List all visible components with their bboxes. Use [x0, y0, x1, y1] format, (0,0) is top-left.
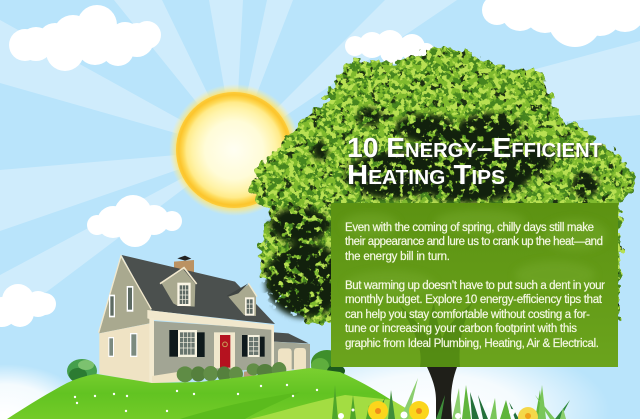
intro paragraphs: can help you stay comfortable without costing a for-	[345, 309, 590, 321]
title: Heating Tips	[347, 159, 505, 190]
intro paragraphs: But warming up doesn’t have to put such a dent in your	[345, 280, 605, 292]
front wall	[153, 321, 274, 377]
eave trim	[147, 310, 274, 330]
white flowers	[338, 402, 515, 419]
intro paragraphs: Even with the coming of spring, chilly days still make	[345, 222, 594, 234]
side windows	[108, 286, 137, 357]
yellow flower left	[368, 401, 388, 419]
tree trunk	[427, 367, 457, 419]
cloud: behind tree	[345, 30, 435, 64]
grass dots	[74, 384, 318, 412]
house	[99, 255, 310, 383]
entry steps	[243, 371, 257, 380]
title: 10 Energy–Efficient	[347, 132, 602, 163]
yellow flower middle	[409, 401, 429, 419]
bush: left of house	[67, 359, 97, 383]
cloud: lower left	[0, 284, 56, 327]
front door	[214, 332, 235, 368]
intro paragraphs: tune or increasing your carbon footprint with this	[345, 323, 577, 335]
tree foliage	[250, 47, 633, 322]
bush: right of house	[311, 350, 345, 377]
flowers	[338, 401, 538, 419]
dormer right	[227, 283, 257, 316]
intro paragraphs: their appearance and lure us to crank up the heat—and	[345, 236, 603, 248]
front left window with shutters	[169, 330, 205, 357]
cloud: top right	[482, 0, 640, 47]
shrubs	[177, 362, 286, 382]
foreground grass blades	[332, 378, 570, 419]
text panel	[331, 203, 618, 367]
grassy hill	[7, 368, 424, 419]
intro paragraphs: graphic from Ideal Plumbing, Heating, Air & Electrical.	[345, 338, 599, 350]
side gable wall	[99, 257, 151, 333]
front right window with shutters	[242, 335, 265, 357]
main roof	[122, 255, 275, 324]
title	[347, 132, 602, 190]
intro paragraphs: monthly budget. Explore 10 energy-efficiency tips that	[345, 294, 603, 306]
lower side wall	[99, 323, 152, 383]
intro paragraphs	[345, 222, 605, 350]
cloud: top left	[9, 5, 161, 71]
chimney	[174, 256, 194, 278]
dormer left	[160, 268, 197, 307]
panel foliage texture	[342, 210, 607, 299]
sun	[169, 84, 301, 216]
intro paragraphs: the energy bill in turn.	[345, 251, 450, 263]
trunk shadow in panel	[400, 302, 472, 367]
garage	[274, 332, 310, 371]
yellow flower right	[518, 407, 538, 419]
cloud: middle left	[87, 195, 182, 247]
foliage shadows	[265, 108, 599, 318]
